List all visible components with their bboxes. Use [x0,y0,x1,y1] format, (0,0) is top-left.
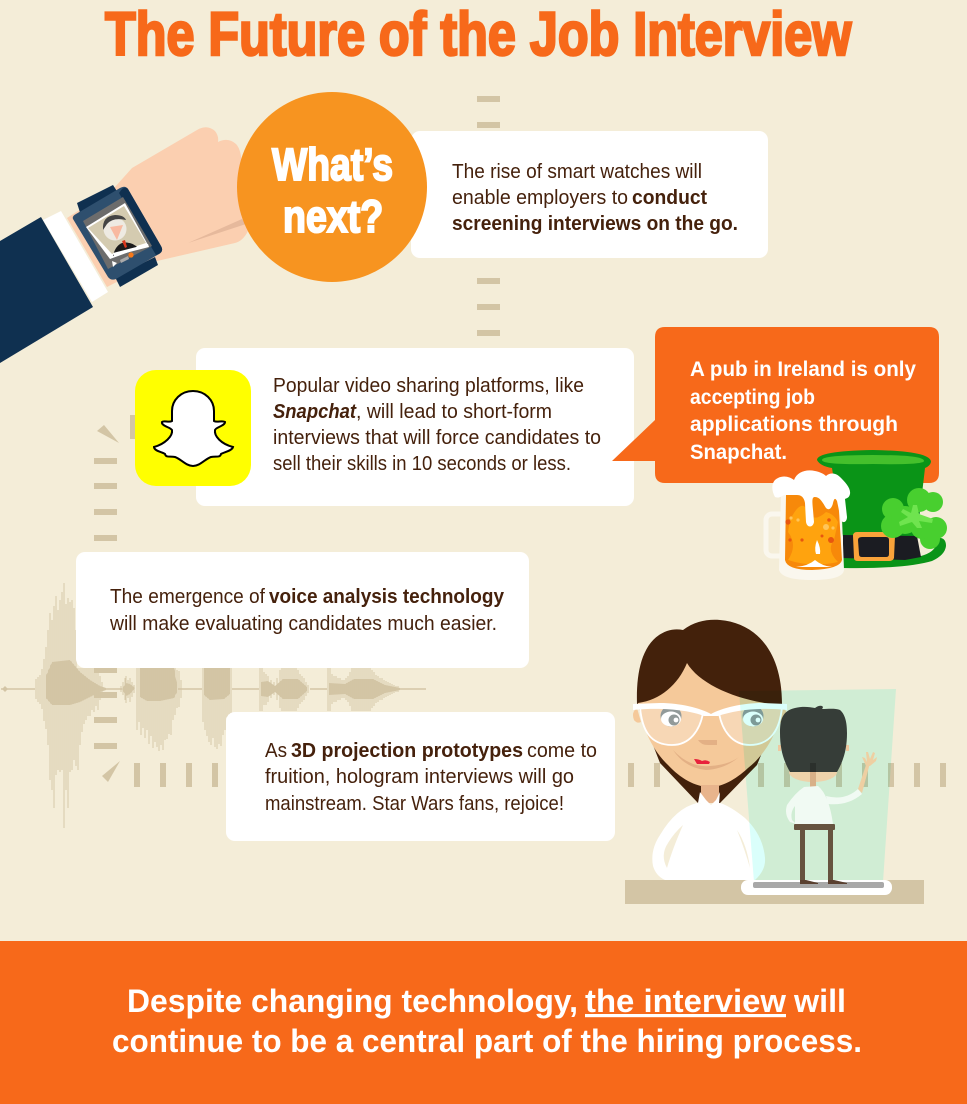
hologram base [741,880,892,895]
raised arm [826,789,862,804]
text: smart watches [452,161,738,235]
heading: What's next? [272,140,393,242]
shoes [800,880,847,884]
video picture [88,206,146,254]
smile [673,750,739,770]
illustration: leprechaun hat [817,450,947,568]
boy face [789,762,837,782]
text: video platforms [273,375,601,475]
collar [698,792,720,807]
title: The Future of the Job Interview [105,0,852,68]
hand [67,127,260,287]
text: video platforms: Popular video sharing platforms, like [273,375,584,397]
text: voice analysis: will make evaluating candidates much easier. [109,613,497,635]
panel: video platforms [196,348,634,506]
tick showing through hair [810,763,816,772]
watch straps [77,185,158,287]
hat band [843,535,921,560]
illustration: beer mug [766,470,850,580]
text: hologram interviews [265,740,597,815]
foam [772,470,850,526]
circle: what's next [237,92,427,282]
text: voice analysis: voice analysis technology [269,586,505,608]
panel: hologram interviews [226,712,615,841]
heading: What's next?: What’s [272,140,393,190]
shirt fold [664,825,750,868]
text: video platforms: sell their skills in 10 seconds or less. [273,453,571,475]
beer highlight [788,506,838,565]
bubbles [785,516,835,543]
neck [810,772,816,788]
jacket sleeve [0,217,93,363]
hat crown [817,450,931,537]
text: hologram interviews: 3D projection prototypes [291,740,523,762]
nose [698,740,717,745]
foam bottom detail [796,540,832,567]
text: smart watches: The rise of smart watches will [452,161,702,183]
illustration: woman with glasses [633,620,787,880]
wrist crease [188,219,246,243]
callout: pub in Ireland: A pub in Ireland is only [690,358,916,381]
shirt [786,786,833,824]
text: video platforms: interviews that will force candidates to [273,427,601,449]
text: hologram interviews: As [265,740,287,762]
text: hologram interviews: come to [527,740,597,762]
ears [633,708,787,723]
beer [785,495,842,570]
watch screen [83,197,152,269]
stool seat [794,824,835,830]
text: hologram interviews: mainstream. Star Wars fans, rejoice! [265,793,564,815]
hand [862,752,877,766]
mug handle [766,514,790,556]
watch body [73,187,162,280]
callout: pub in Ireland: applications through [690,413,898,436]
video controls [112,244,149,267]
hair [637,620,782,803]
buckle [853,532,895,561]
banner: conclusion: will [793,983,846,1019]
boy hair [780,706,847,772]
hat highlight [822,455,924,464]
neck [701,785,719,803]
banner: conclusion [0,941,967,1104]
callout: pub in Ireland [612,327,939,483]
text: video platforms: Snapchat [273,401,357,423]
hat brim [843,538,946,568]
illustration: hologram candidate [778,706,877,881]
table [625,880,924,904]
text: smart watches: screening interviews on the go. [452,213,738,235]
text: voice analysis: The emergence of [110,586,265,608]
lips [694,759,710,764]
banner: conclusion: Despite changing technology, [127,983,578,1019]
boy ears [778,745,849,751]
right eye [742,706,764,726]
text: video platforms: , will lead to short-form [356,401,552,423]
left eye [660,706,682,726]
shirt cuff [43,211,108,302]
face [638,663,782,787]
callout: pub in Ireland: Snapchat. [690,441,787,464]
hologram beam [739,689,896,882]
callout: pub in Ireland: accepting job [690,386,815,409]
icon: snapchat [135,370,251,486]
text: voice analysis [109,586,505,635]
illustration: arm with smart watch [0,127,260,363]
forearm [858,762,870,793]
shirt [652,803,765,880]
panel: voice analysis [76,552,529,668]
heading: What's next?: next? [283,191,383,242]
voice waveform [1,583,426,828]
shamrock [881,488,947,549]
text: hologram interviews: fruition, hologram interviews will go [265,766,574,788]
video frame [86,203,148,259]
stool legs [800,828,833,881]
glasses [633,703,787,745]
text: smart watches: enable employers to [452,187,628,209]
base plate [753,882,884,888]
glass [779,492,844,580]
watch side [119,188,162,255]
panel: smart watches [411,131,768,258]
banner: conclusion: the interview [585,983,786,1019]
interviewee figure [103,215,138,256]
banner: conclusion: continue to be a central part of the hiring process. [112,1023,862,1059]
text: smart watches: conduct [632,187,707,209]
